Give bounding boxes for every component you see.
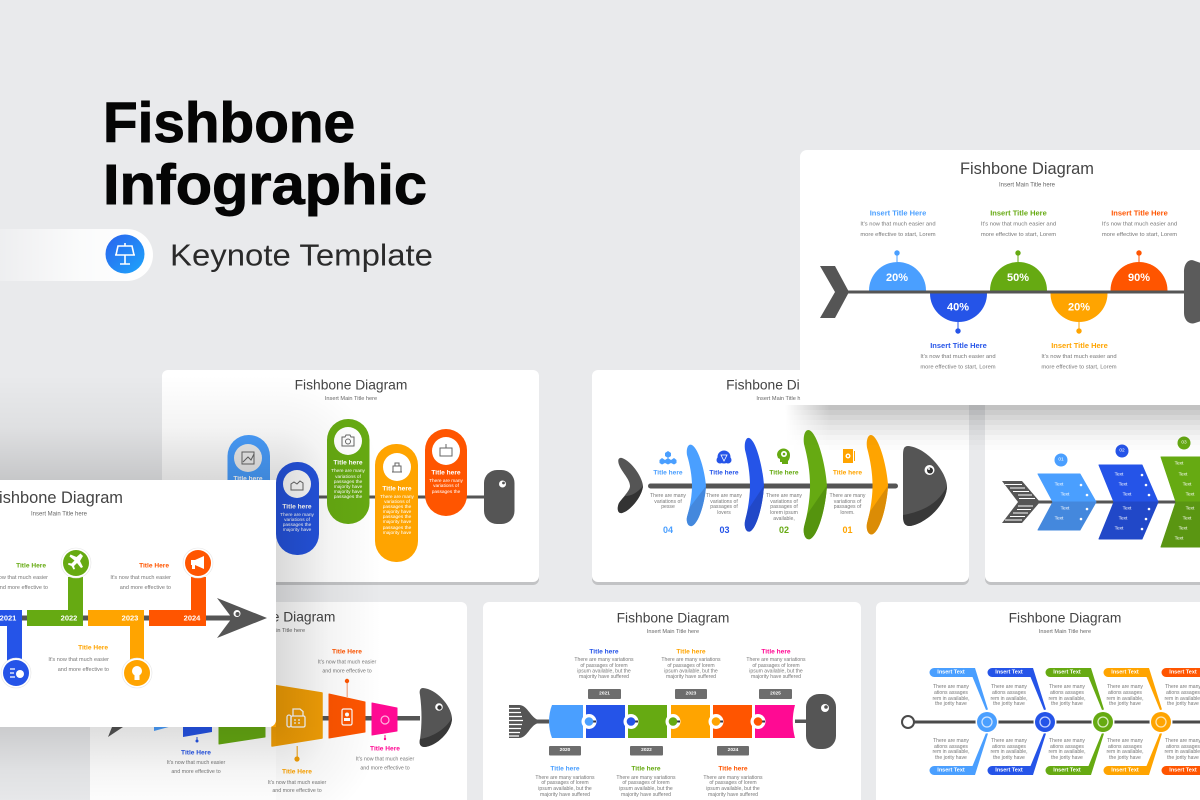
item 02: There are many — [766, 493, 802, 499]
bone: orange — [867, 435, 888, 534]
chevron: navy: Text — [1123, 492, 1132, 498]
lower labels: ipsum available, but the — [706, 786, 760, 792]
item 02: available, — [773, 516, 795, 522]
bone group: navy: There are many — [991, 684, 1027, 690]
item 01: variations of — [834, 499, 862, 505]
item: orange 20%: 20% — [1068, 302, 1090, 314]
bone group: green: There are many — [1049, 684, 1085, 690]
bone group: red: Insert Text — [1169, 670, 1197, 676]
item 02: lorem ipsum — [770, 510, 798, 516]
upper labels: of passages of lorem — [752, 663, 800, 669]
step: 2024 — [149, 548, 213, 626]
item 04 — [650, 451, 686, 535]
bone group: green: There are many — [1049, 738, 1085, 744]
item 04: Title here — [653, 470, 683, 476]
pill: navy: variations of — [284, 516, 311, 522]
bone group: navy — [988, 668, 1056, 775]
bone group: blue: There are many — [933, 738, 969, 744]
bone: navy — [745, 438, 764, 532]
panel: trapezoid diagram — [90, 602, 467, 800]
chevron: blue — [1038, 454, 1096, 530]
bone group: blue — [930, 668, 998, 775]
segment: navy — [167, 715, 225, 775]
year tags: 2025 — [770, 690, 781, 696]
tail — [1002, 481, 1040, 523]
segment: pink: and more effective to — [360, 766, 410, 772]
chevron: blue: Text — [1061, 506, 1070, 512]
pill: navy: There are many — [280, 512, 315, 518]
item: blue 20%: 20% — [886, 272, 908, 284]
lower labels — [535, 766, 763, 798]
item: orange 20% — [1041, 294, 1117, 370]
bone group: red: the jority have — [1167, 701, 1199, 707]
chevron: green: Text — [1186, 506, 1195, 512]
pill: blue — [228, 435, 270, 525]
year tags: 2022 — [641, 747, 652, 753]
pill: orange: Title here — [382, 486, 412, 492]
bone group: navy: rem in available, — [990, 749, 1028, 755]
chevron: blue: 01 — [1058, 456, 1064, 462]
tail — [618, 458, 643, 513]
bone group: red: Insert Text — [1169, 768, 1197, 774]
segment: pink: Title Here — [370, 746, 400, 752]
label: green: Title Here — [16, 562, 46, 570]
bone group: red: There are many — [1165, 738, 1200, 744]
item 02 — [766, 448, 802, 535]
year tags: 2021 — [599, 690, 610, 696]
heading: Fishbone Diagram — [960, 160, 1094, 178]
bone group: navy: the jority have — [993, 701, 1025, 707]
bone group: green: the jority have — [1051, 755, 1083, 761]
label: orange: and more effective to — [58, 667, 109, 673]
year tags: 2024 — [728, 747, 739, 753]
item: navy 40%: 40% — [947, 302, 969, 314]
bone group: blue: Insert Text — [937, 670, 965, 676]
chevron: navy: Text — [1119, 516, 1128, 522]
segment: red: Title Here — [332, 648, 362, 656]
bone group: green: Insert Text — [1053, 768, 1081, 774]
pill: orange: majority have — [383, 508, 412, 514]
bone group: orange: There are many — [1107, 684, 1143, 690]
bone group: red: ations assages — [1166, 690, 1200, 696]
pill: orange: variations of — [384, 498, 411, 504]
bone group: green: Insert Text — [1053, 670, 1081, 676]
chevron: green — [1161, 436, 1200, 547]
subheading: Insert Main Title here — [1039, 629, 1091, 635]
upper labels: There are many variations — [746, 657, 806, 663]
pill: orange: passages the — [383, 514, 412, 520]
main title — [103, 91, 427, 217]
item 01: passages of — [834, 504, 862, 510]
label: orange — [48, 644, 109, 673]
puzzle pieces — [549, 705, 795, 738]
spine — [847, 290, 1187, 294]
icon: keynote podium — [106, 234, 144, 274]
item 01: Title here — [833, 470, 862, 476]
upper labels: Title here — [676, 648, 706, 656]
bone group: navy: Insert Text — [995, 768, 1023, 774]
upper labels: majority have suffered — [666, 674, 716, 680]
subtitle badge — [0, 229, 433, 281]
upper labels: ipsum available, but the — [749, 668, 803, 674]
segment: red: and more effective to — [322, 668, 372, 674]
lower labels: There are many variations — [535, 775, 595, 781]
main title: Infographic — [103, 153, 427, 217]
label: orange: It's now that much easier — [48, 657, 109, 663]
upper labels: ipsum available, but the — [577, 668, 631, 674]
lower labels: majority have suffered — [540, 792, 590, 798]
bone group: orange: the jority have — [1109, 755, 1141, 761]
item: orange 20%: It's now that much easier and — [1041, 354, 1117, 360]
pill: orange: majority have — [383, 518, 412, 524]
item: red 90%: 90% — [1128, 272, 1150, 284]
heading: Fishbone Diagram — [617, 610, 729, 626]
shadow: left card — [0, 375, 381, 800]
bone group: orange: Insert Text — [1111, 768, 1139, 774]
item 04: pesse — [661, 504, 675, 510]
bone: green — [804, 430, 827, 539]
lower labels: of passages of lorem — [709, 780, 757, 786]
label: red: and more effective to — [120, 585, 171, 591]
item: blue 20%: Insert Title Here — [870, 208, 926, 218]
label: green — [0, 562, 48, 591]
item: orange 20%: more effective to start, Lorem — [1041, 364, 1117, 370]
lower labels: Title here — [631, 766, 661, 772]
segment: navy: Title Here — [181, 750, 211, 756]
item: blue 20% — [860, 208, 936, 290]
pill: red — [425, 429, 467, 516]
pill: navy: Title here — [282, 504, 312, 510]
lower labels: ipsum available, but the — [538, 786, 592, 792]
spine — [1035, 500, 1200, 504]
segment: orange: and more effective to — [272, 788, 322, 794]
upper labels: majority have suffered — [579, 674, 629, 680]
heading: Fishbone Diagram — [223, 610, 335, 624]
bone group: red — [1162, 668, 1200, 775]
heading: Fishbone Diagram — [295, 378, 407, 392]
tail — [108, 727, 123, 737]
chevron: navy — [1099, 444, 1158, 539]
spine — [120, 716, 420, 720]
bone group: blue: rem in available, — [932, 696, 970, 702]
pill: green: majority have — [334, 488, 363, 494]
pill: blue: Title here — [233, 476, 263, 482]
chevron: green: Text — [1186, 492, 1195, 498]
chevron: green: Text — [1183, 482, 1192, 488]
pill: red: There are many — [429, 478, 464, 484]
bone group: blue: Insert Text — [937, 768, 965, 774]
pill: navy: majority have — [283, 526, 312, 532]
pill: green: Title here — [333, 460, 363, 466]
pill: orange — [375, 444, 418, 562]
subheading: Insert Main Title here — [325, 396, 377, 402]
label: red: It's now that much easier — [110, 575, 171, 581]
pill: green — [327, 419, 370, 524]
bone group: green: rem in available, — [1048, 749, 1086, 755]
bone group: navy: Insert Text — [995, 670, 1023, 676]
segment: orange: Title Here — [282, 768, 312, 776]
item 03: 03 — [719, 525, 730, 535]
step: 2024: 2024 — [184, 614, 201, 622]
item: red 90% — [1102, 208, 1177, 290]
segment: orange — [268, 685, 326, 794]
step: 2022: 2022 — [61, 614, 77, 622]
main title: Fishbone — [103, 91, 355, 155]
segment: green — [219, 700, 265, 744]
pill: green: majority have — [334, 484, 363, 490]
chevron: green: Text — [1175, 536, 1184, 542]
segment: blue — [154, 720, 176, 731]
bone group: green — [1046, 668, 1114, 775]
item 03: lovers — [717, 510, 731, 516]
item: navy 40%: more effective to start, Lorem — [920, 364, 996, 370]
arrow head — [217, 598, 267, 638]
chevron: navy: 02 — [1119, 448, 1125, 454]
comb tail — [509, 705, 549, 738]
bone group: red: There are many — [1165, 684, 1200, 690]
upper labels — [574, 648, 806, 680]
chevron: green: Text — [1183, 516, 1192, 522]
upper labels: Title here — [761, 648, 791, 656]
segment: red: It's now that much easier — [318, 660, 376, 666]
bone group: navy: ations assages — [992, 744, 1026, 750]
lower labels: of passages of lorem — [541, 780, 589, 786]
bone group: blue: the jority have — [935, 701, 967, 707]
subheading: Insert Main Title here — [756, 396, 809, 402]
item 02: 02 — [779, 525, 789, 535]
item 03: Title here — [709, 470, 739, 476]
segment: navy: It's now that much easier — [167, 760, 225, 766]
item: orange 20%: Insert Title Here — [1051, 341, 1108, 350]
bone group: blue: the jority have — [935, 755, 967, 761]
bone group: orange: There are many — [1107, 738, 1143, 744]
panel: timeline arrow diagram — [0, 480, 276, 727]
panel: fish crescent diagram — [592, 370, 969, 585]
lower labels: majority have suffered — [621, 792, 671, 798]
item 02: Title here — [769, 470, 799, 476]
bone: blue — [687, 445, 706, 526]
lower labels: ipsum available, but the — [619, 786, 673, 792]
item 01: lorem. — [840, 510, 855, 516]
spine — [265, 496, 487, 498]
chevron: green: Text — [1175, 460, 1184, 466]
heading: Fishbone Diagram — [726, 378, 839, 392]
upper labels: There are many variations — [574, 657, 634, 663]
subheading: Insert Main Title here — [647, 629, 699, 635]
chevron: green: Text — [1179, 526, 1188, 532]
subheading: Insert Main Title here — [31, 512, 88, 518]
bone group: navy: There are many — [991, 738, 1027, 744]
bone group: orange: Insert Text — [1111, 670, 1139, 676]
item: navy 40%: Insert Title Here — [930, 341, 987, 350]
panel: skeleton diagram — [876, 602, 1200, 800]
lower labels: Title here — [550, 766, 580, 772]
item: red 90%: It's now that much easier and — [1102, 222, 1177, 228]
lower labels: Title here — [718, 766, 748, 772]
pill: red: passages the — [432, 488, 461, 494]
pill: red: Title here — [431, 470, 461, 476]
item 04: variations of — [654, 499, 682, 505]
pill: green: variations of — [335, 474, 362, 480]
lower labels: There are many variations — [616, 775, 676, 781]
label: orange: Title Here — [78, 644, 108, 652]
spine — [0, 616, 235, 620]
head — [806, 694, 836, 749]
pill: green: There are many — [331, 468, 366, 474]
spine right — [795, 720, 809, 723]
head — [1184, 260, 1200, 323]
item: red 90%: more effective to start, Lorem — [1102, 232, 1177, 238]
item: navy 40%: It's now that much easier and — [920, 354, 996, 360]
chevron: navy: Text — [1115, 472, 1124, 478]
bone group: navy: rem in available, — [990, 696, 1028, 702]
item: green 50%: more effective to start, Lorem — [981, 232, 1056, 238]
pill: orange: passages the — [383, 504, 412, 510]
item 03: passages of — [710, 504, 738, 510]
bone group: blue: ations assages — [934, 690, 968, 696]
chevron: blue: Text — [1055, 482, 1064, 488]
bone group: green: ations assages — [1050, 744, 1084, 750]
item 01: There are many — [830, 493, 866, 499]
panel: chevron diagram — [985, 370, 1200, 585]
bone group: navy: ations assages — [992, 690, 1026, 696]
item: navy 40% — [920, 294, 996, 370]
item: red 90%: Insert Title Here — [1111, 208, 1168, 218]
bone group: blue: rem in available, — [932, 749, 970, 755]
year tags — [549, 689, 792, 756]
segment: pink — [356, 703, 414, 772]
heading: Fishbone Diagram — [1009, 610, 1121, 626]
shadow: top-right card — [785, 405, 1200, 450]
bone group: orange: rem in available, — [1106, 749, 1144, 755]
head — [484, 470, 514, 524]
item: green 50% — [981, 208, 1056, 290]
bone group: green: rem in available, — [1048, 696, 1086, 702]
label: red: Title Here — [139, 562, 169, 570]
panel: pills diagram — [162, 370, 539, 585]
item 03 — [706, 450, 742, 535]
chevron: navy: Text — [1115, 526, 1124, 532]
bone group: blue: ations assages — [934, 744, 968, 750]
upper labels: of passages of lorem — [667, 663, 715, 669]
item: green 50%: Insert Title Here — [990, 208, 1047, 218]
head — [903, 446, 947, 526]
upper labels: ipsum available, but the — [664, 668, 718, 674]
bone group: green: ations assages — [1050, 690, 1084, 696]
bone group: orange: rem in available, — [1106, 696, 1144, 702]
upper labels: of passages of lorem — [580, 663, 628, 669]
segment: orange: It's now that much easier — [268, 780, 326, 786]
icon: fax — [287, 709, 305, 727]
upper labels: majority have suffered — [751, 674, 801, 680]
item 01 — [830, 449, 866, 535]
pill: green: passages the — [334, 494, 363, 500]
pill: navy: passages the — [283, 522, 312, 528]
bone group: red: ations assages — [1166, 744, 1200, 750]
item 04: There are many — [650, 493, 686, 499]
spine — [648, 484, 898, 488]
item: green 50%: It's now that much easier and — [981, 222, 1056, 228]
bone group: red: the jority have — [1167, 755, 1199, 761]
year tags: 2020 — [560, 747, 571, 753]
bone group: orange: the jority have — [1109, 701, 1141, 707]
step: 2021: 2021 — [0, 614, 16, 622]
segment: pink: It's now that much easier — [356, 756, 414, 762]
item: blue 20%: It's now that much easier and — [860, 222, 936, 228]
bone group: green: the jority have — [1051, 701, 1083, 707]
subheading: Insert Main Title here — [253, 628, 305, 634]
bone group: orange: ations assages — [1108, 690, 1142, 696]
step: 2022 — [27, 548, 91, 626]
item 01: 01 — [842, 525, 853, 535]
item: green 50%: 50% — [1007, 272, 1029, 284]
pill: navy — [276, 462, 319, 555]
segment: red — [318, 648, 376, 738]
bone group: blue: There are many — [933, 684, 969, 690]
icon: phone — [342, 709, 352, 725]
item 04: 04 — [663, 525, 673, 535]
chevron: blue: Text — [1061, 492, 1070, 498]
segment: navy: and more effective to — [171, 769, 221, 775]
item 03: variations of — [710, 499, 738, 505]
pill: green: passages the — [334, 478, 363, 484]
item 03: There are many — [706, 493, 742, 499]
subtitle: Keynote Template — [170, 238, 433, 272]
chevron: blue: Text — [1055, 516, 1064, 522]
upper labels: There are many variations — [661, 657, 721, 663]
chevron: green: 03 — [1181, 440, 1187, 446]
head — [420, 688, 452, 747]
pill: orange: majority have — [383, 530, 412, 536]
bone group: navy: the jority have — [993, 755, 1025, 761]
tail — [820, 266, 849, 318]
panel: puzzle diagram — [483, 602, 861, 800]
chevron: green: Text — [1179, 472, 1188, 478]
bone group: orange — [1104, 668, 1172, 775]
pill: orange: There are many — [380, 494, 415, 500]
step: 2021 — [0, 610, 31, 688]
item: blue 20%: more effective to start, Lorem — [860, 232, 936, 238]
lower labels: of passages of lorem — [622, 780, 670, 786]
year tags: 2023 — [686, 690, 697, 696]
spine — [902, 716, 1200, 728]
upper labels: Title here — [589, 648, 619, 656]
step: 2023 — [88, 610, 152, 688]
subheading: Insert Main Title here — [999, 182, 1056, 188]
label: red — [110, 562, 171, 591]
bone group: orange: ations assages — [1108, 744, 1142, 750]
pill: orange: passages the — [383, 524, 412, 530]
lower labels: There are many variations — [703, 775, 763, 781]
panel: semicircle percentage diagram — [800, 150, 1200, 405]
chevron: navy: Text — [1119, 482, 1128, 488]
step: 2023: 2023 — [122, 614, 138, 622]
chevron: navy: Text — [1123, 506, 1132, 512]
item 02: variations of — [770, 499, 798, 505]
lower labels: majority have suffered — [708, 792, 758, 798]
item 02: passages of — [770, 504, 798, 510]
pill: red: variations of — [433, 482, 460, 488]
